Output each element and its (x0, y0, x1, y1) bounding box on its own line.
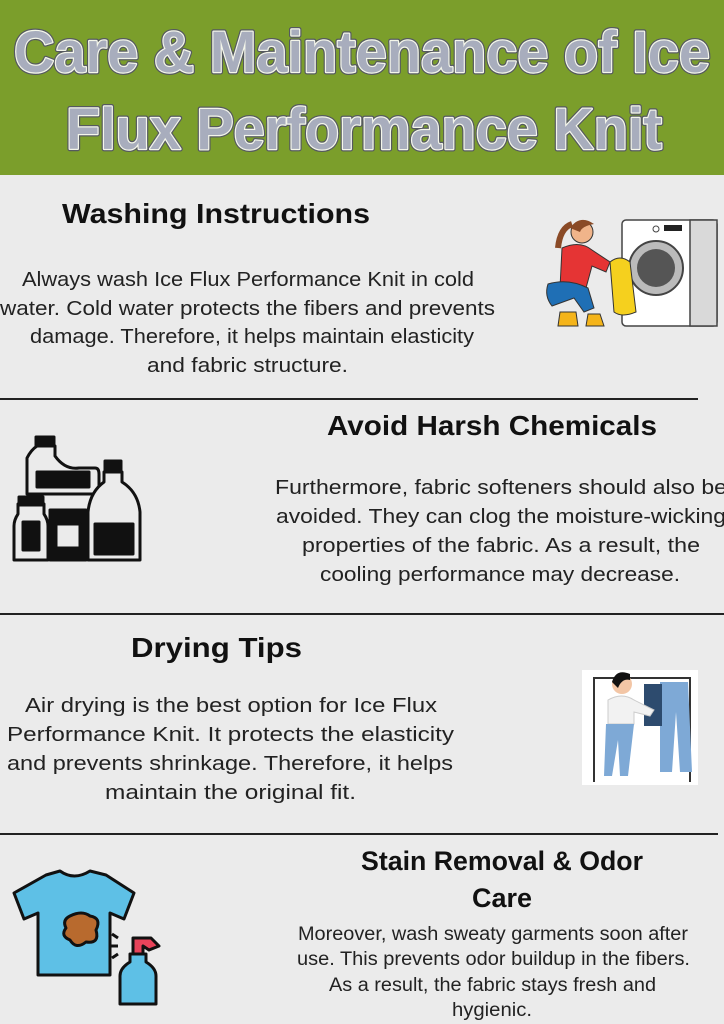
heading: Drying Tips: Drying Tips (131, 632, 302, 663)
title: Care & Maintenance of Ice (14, 20, 710, 85)
text: drying: Air drying is the best option for Ice Flux (25, 695, 437, 717)
divider (0, 398, 698, 400)
heading: Stain Removal & Odor Care: Care (472, 883, 532, 913)
text: drying: and prevents shrinkage. Therefore, it helps (7, 753, 453, 775)
heading: Stain Removal & Odor Care (361, 846, 643, 913)
icon: woman with jeans on rack (582, 670, 698, 785)
text: stain: use. This prevents odor buildup in the fibers. (297, 949, 690, 970)
text: chemicals: properties of the fabric. As a result, the (302, 535, 700, 557)
text: stain: hygienic. (452, 1000, 532, 1021)
text: drying: Performance Knit. It protects the elasticity (7, 724, 454, 746)
heading: Stain Removal & Odor Care: Stain Removal & Odor (361, 846, 643, 876)
title banner: Care & Maintenance of Ice (14, 20, 710, 85)
title: Flux Performance Knit (66, 97, 662, 162)
text: washing: Always wash Ice Flux Performance Knit in cold (22, 269, 474, 291)
icon: chemical bottles (14, 437, 140, 560)
text: chemicals (275, 477, 724, 586)
text: drying: maintain the original fit. (105, 782, 356, 804)
title banner: Flux Performance Knit (66, 97, 662, 162)
icon: woman at washing machine (547, 220, 717, 326)
text: stain: As a result, the fabric stays fresh and (329, 975, 656, 996)
heading: Avoid Harsh Chemicals: Avoid Harsh Chemicals (327, 410, 657, 441)
heading: Washing Instructions: Washing Instructions (62, 198, 370, 229)
title (14, 20, 710, 162)
text: washing: damage. Therefore, it helps maintain elasticity (30, 326, 474, 348)
text: stain: Moreover, wash sweaty garments soon after (298, 924, 689, 945)
text: chemicals: avoided. They can clog the moisture-wicking (276, 506, 724, 528)
divider (0, 833, 718, 835)
text: washing: water. Cold water protects the fibers and prevents (0, 298, 495, 320)
title banner (0, 0, 724, 175)
text: chemicals: Furthermore, fabric softeners should also be (275, 477, 724, 499)
icon: stained shirt and spray (14, 871, 159, 1004)
text: washing: and fabric structure. (147, 355, 348, 377)
text: stain (297, 924, 690, 1021)
divider (0, 613, 724, 615)
text: drying (7, 695, 454, 804)
text: chemicals: cooling performance may decrease. (320, 564, 680, 586)
text: washing (0, 269, 495, 377)
